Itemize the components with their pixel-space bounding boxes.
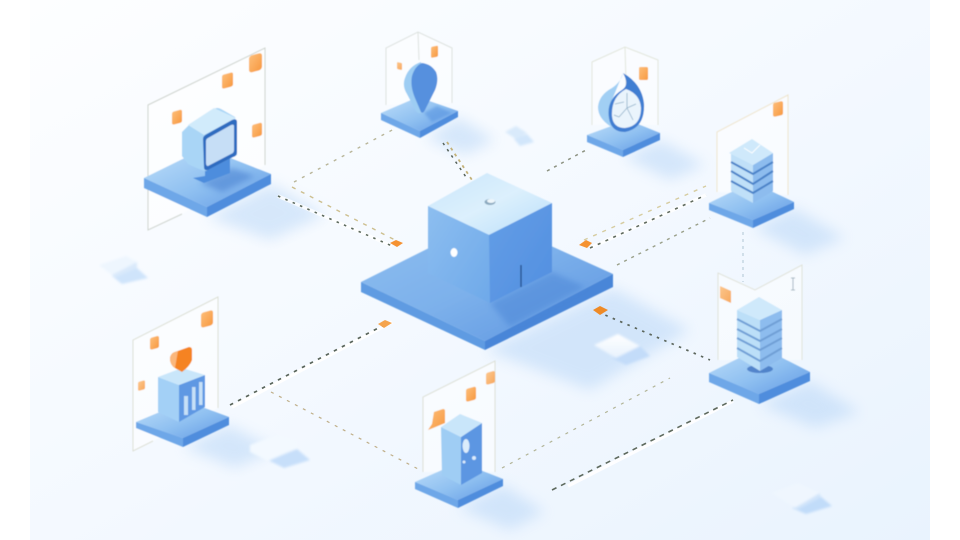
decorative slab: top <box>505 126 534 146</box>
connector: vertical between servers <box>742 232 744 282</box>
node: server top right <box>709 95 794 228</box>
glass panel <box>592 47 658 125</box>
decorative slab: left <box>99 256 148 284</box>
node: chart cube <box>133 297 229 451</box>
platform <box>709 347 810 404</box>
glass panel with orange tags <box>423 361 495 472</box>
node: drop <box>587 47 660 157</box>
icon: bar chart cube <box>158 368 205 422</box>
glass panel <box>386 32 452 105</box>
glass panel <box>718 265 802 360</box>
connector: tower faint <box>502 378 670 468</box>
icon: tower <box>441 414 482 485</box>
node: tower <box>415 361 503 508</box>
platform <box>587 120 660 157</box>
icon: orange shield <box>170 347 192 372</box>
node: server bottom right <box>709 265 810 404</box>
connector: upper left faint <box>294 128 396 182</box>
hub cube <box>428 173 552 303</box>
glass panel with orange tags <box>148 48 265 230</box>
connector: hub to lower left <box>230 320 392 407</box>
glass panel <box>717 95 788 195</box>
icon: data drop <box>598 73 644 133</box>
icon: server stack <box>737 297 782 373</box>
connector: hub to lower right <box>593 306 710 360</box>
connector: drop to hub <box>547 149 588 171</box>
connector: servers to hub <box>579 186 710 265</box>
node: central hub <box>361 173 613 350</box>
connector: lower right long <box>552 400 733 490</box>
hub platform <box>361 218 613 350</box>
decorative slab: bottom <box>250 435 310 468</box>
decorative slab: centre <box>594 334 650 365</box>
connector: lower left to tower <box>271 392 420 470</box>
connector: monitor to hub <box>278 187 403 247</box>
icon: pin <box>404 62 437 113</box>
icon: monitor <box>182 108 255 192</box>
node: pin <box>381 32 458 138</box>
platform <box>136 401 229 447</box>
platform <box>144 148 271 217</box>
glass panel with orange tags <box>133 297 218 451</box>
connector: pin to hub <box>443 142 472 180</box>
floor shadows <box>183 117 860 530</box>
decorative slab: bottom right <box>772 483 832 514</box>
platform <box>709 182 794 228</box>
node: monitor <box>144 48 271 230</box>
platform <box>381 97 458 138</box>
icon: server stack <box>729 139 773 203</box>
platform <box>415 462 503 508</box>
